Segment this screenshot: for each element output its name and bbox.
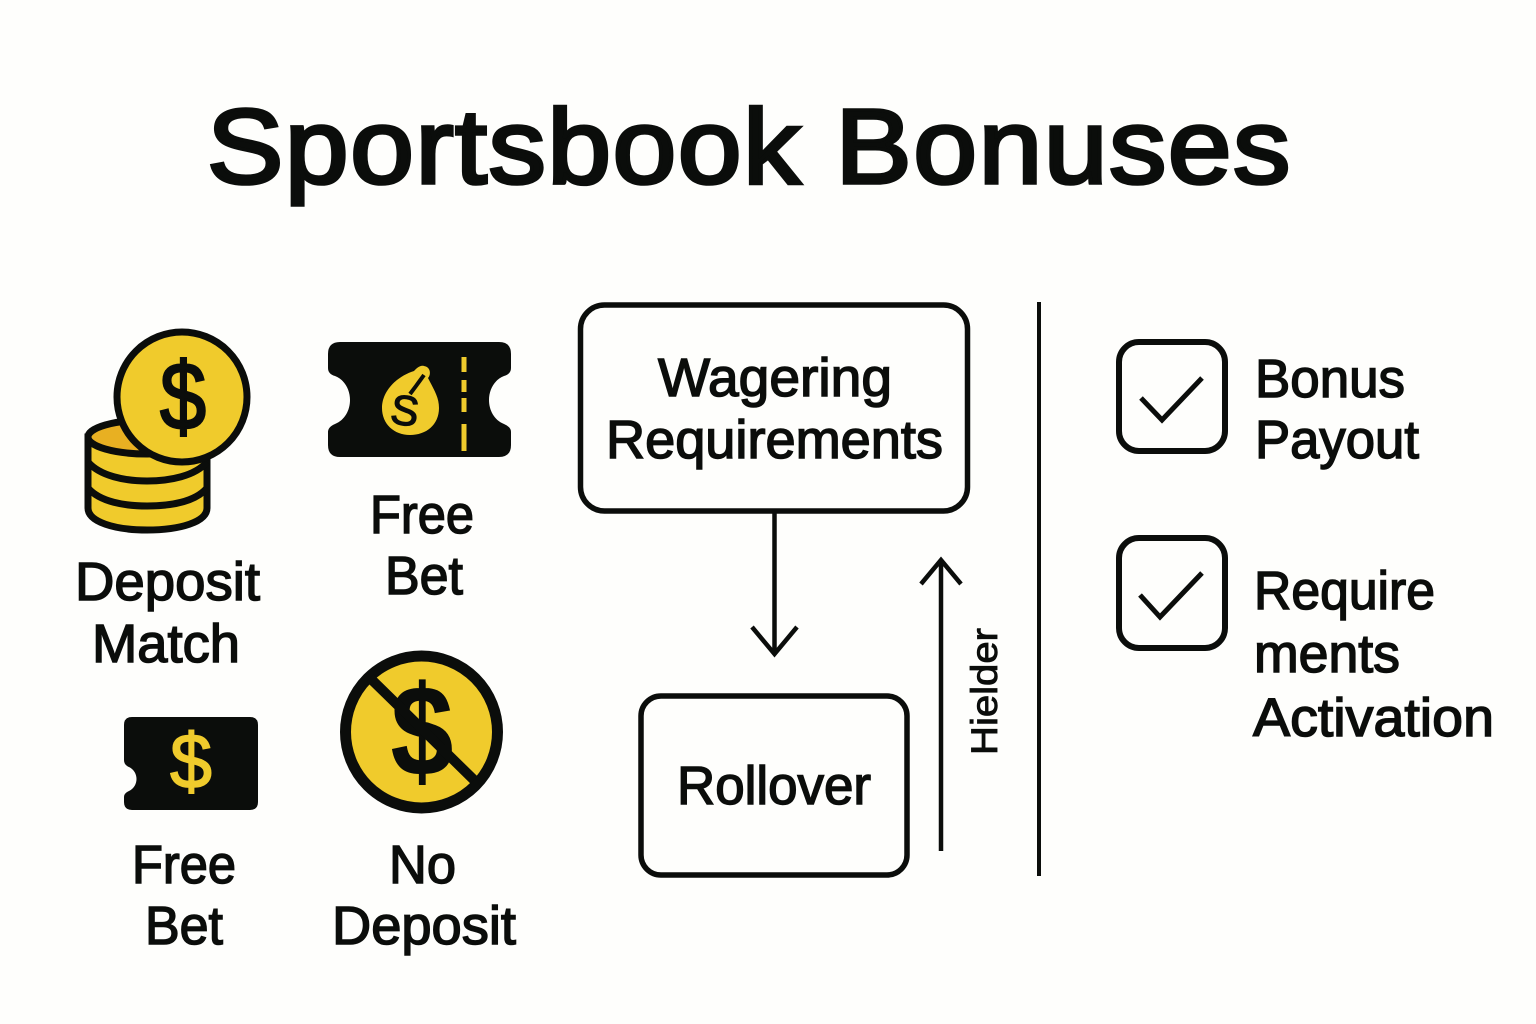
icon: coin stack	[88, 332, 247, 530]
icon: checkbox	[1119, 342, 1225, 451]
checklist: bonus payout: Payout	[1255, 410, 1419, 470]
icon: crossed dollar: $	[391, 660, 453, 803]
panel: free bet ticket: Bet	[385, 546, 463, 606]
box: wagering requirements: Requirements	[606, 410, 943, 470]
box: wagering requirements	[580, 305, 968, 511]
panel: no deposit: Deposit	[332, 896, 516, 956]
box: rollover	[641, 696, 907, 875]
icon: small ticket: $	[170, 717, 212, 805]
rotated label: Hielder	[964, 628, 1005, 755]
arrow: up	[921, 560, 961, 851]
panel: deposit match: Match	[92, 614, 240, 674]
divider	[1037, 302, 1041, 876]
checklist: requirements activation: ments	[1254, 624, 1400, 684]
icon: crossed dollar	[346, 656, 498, 808]
panel: deposit match	[75, 332, 260, 674]
checklist: bonus payout	[1119, 342, 1419, 470]
title: Sportsbook Bonuses	[207, 88, 1292, 206]
label: free bet: Free	[370, 485, 474, 545]
icon: coin stack: $	[160, 343, 206, 450]
label: requirements activation: Require	[1254, 561, 1435, 621]
label: no deposit: No	[389, 835, 456, 895]
icon: ticket with money bag: S	[388, 385, 422, 436]
checklist: requirements activation: Activation	[1253, 688, 1494, 748]
panel: no deposit	[332, 656, 516, 956]
icon: ticket with money bag	[328, 342, 511, 457]
box: rollover: Rollover	[677, 756, 871, 816]
icon: small ticket	[124, 717, 258, 810]
arrow: down to rollover	[752, 513, 797, 654]
checklist: requirements activation	[1119, 538, 1494, 748]
label: bonus payout: Bonus	[1255, 349, 1405, 409]
panel: free bet small	[124, 717, 258, 956]
box: wagering requirements: Wagering	[658, 348, 892, 408]
panel: free bet ticket	[328, 342, 511, 606]
label: free bet: Free	[132, 835, 236, 895]
label: deposit match: Deposit	[75, 552, 260, 612]
icon: checkbox	[1119, 538, 1225, 648]
panel: free bet small: Bet	[145, 896, 223, 956]
